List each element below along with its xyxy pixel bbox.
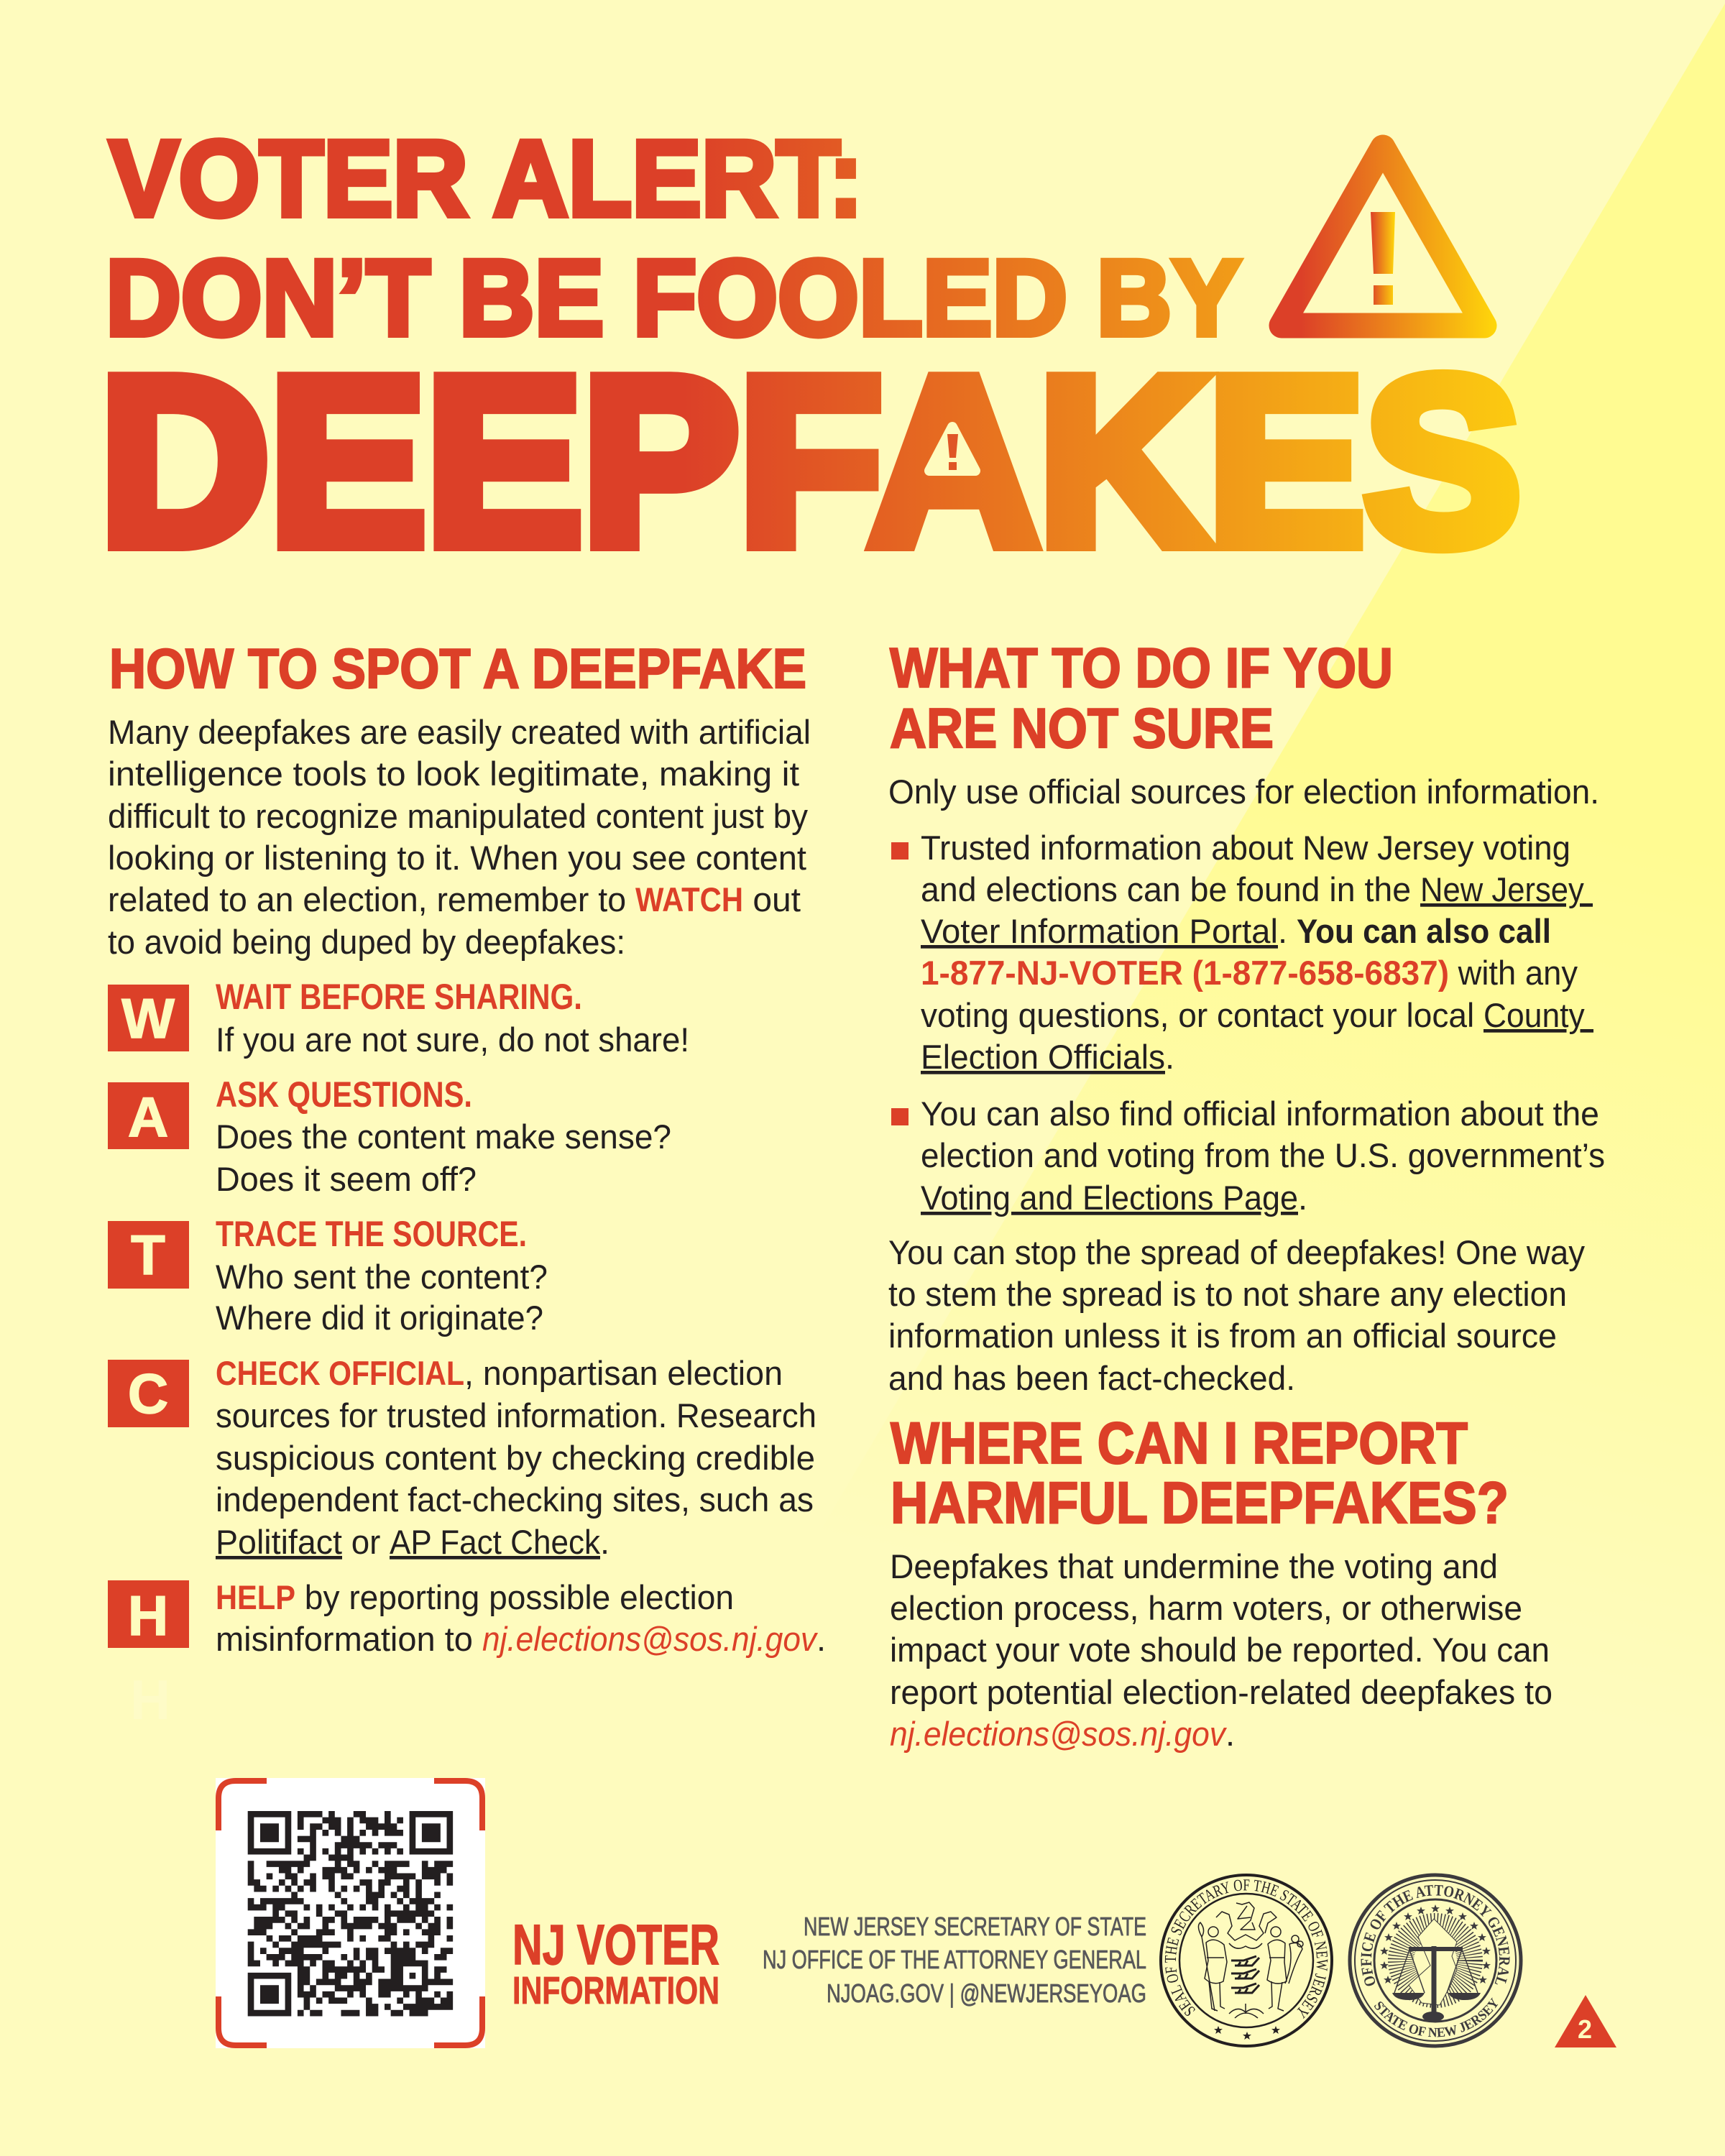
step H: help: nj.elections@sos.nj.gov [482,1620,818,1658]
bullet: U.S. government page: You can also find official information about the [921,1095,1599,1133]
heading: how to spot: HOW TO SPOT A DEEPFAKE [109,637,806,700]
page number badge [1555,1995,1616,2047]
QR code card [216,1778,485,2048]
text block: intro: Many deepfakes are easily created with artificial [108,713,811,751]
step W: wait before sharing: If you are not sure, do not share! [216,1021,689,1059]
text block: report details: Deepfakes that undermine the voting and [890,1547,1498,1585]
heading: where to report: WHERE CAN I REPORT [891,1411,1468,1476]
step C: check official: AP Fact Check [390,1523,600,1561]
bullet: U.S. government page: election and voting from the U.S. government’s [921,1136,1605,1174]
panel: what to do if you are not sure [888,636,1605,1397]
step A: ask questions: Does the content make sense? [216,1118,671,1156]
text block: report details: impact your vote should be reported. You can [890,1631,1550,1669]
step H: help: misinformation to [216,1620,482,1658]
text block: report details: nj.elections@sos.nj.gov [890,1715,1227,1753]
bullet: trusted information: . [1165,1038,1174,1076]
text block: intro [108,713,811,961]
step T: trace the source: TRACE THE SOURCE. [216,1214,527,1254]
bullet: trusted information: County [1484,996,1593,1034]
step C: check official: or [342,1523,390,1561]
text block: intro: to avoid being duped by deepfakes: [108,923,625,961]
step A: ask questions: A [128,1085,168,1148]
step H: help [108,1578,826,1658]
bullet: trusted information [891,829,1593,1076]
step C: check official: independent fact-checking sites, such as [216,1480,814,1519]
QR caption: NJ voter information: NJ VOTER [512,1912,719,1976]
step W: wait before sharing: W [121,987,175,1050]
bullet: U.S. government page [891,1095,1605,1217]
text block: intro: WATCH [635,880,743,918]
QR caption: NJ voter information: INFORMATION [512,1969,719,2012]
panel: how to spot a deepfake [108,637,826,1731]
text block: stop the spread: to stem the spread is to not share any election [888,1275,1567,1313]
heading: what to do: WHAT TO DO IF YOU [890,636,1393,699]
step W: wait before sharing [108,977,689,1059]
step T: trace the source [108,1214,548,1337]
step H: help: HELP [216,1578,295,1616]
seal: attorney general [1348,1873,1522,2048]
step H: help: by reporting possible election [295,1578,734,1616]
title: DON’T BE FOOLED BY [106,237,1241,358]
bullet: trusted information: Trusted information about New Jersey voting [921,829,1570,867]
step C: check official [108,1354,816,1561]
footer agency text: NJ OFFICE OF THE ATTORNEY GENERAL [763,1945,1146,1974]
text block: intro: out [743,880,801,918]
text block: report details [890,1547,1552,1753]
QR caption: NJ voter information [512,1912,719,2012]
text block: intro: difficult to recognize manipulated content just by [108,797,808,835]
text block: stop the spread: You can stop the spread of deepfakes! One way [888,1233,1585,1271]
step H: help: H [128,1584,168,1647]
text block: intro: looking or listening to it. When you see content [108,839,806,877]
step A: ask questions: ASK QUESTIONS. [216,1074,472,1115]
panel: where can I report [890,1411,1552,1753]
footer agency text [763,1912,1146,2008]
text block: official sources: Only use official sources for election information. [888,773,1599,811]
step C: check official: . [600,1523,610,1561]
icon: warning triangle [1282,147,1484,326]
text block: report details: election process, harm voters, or otherwise [890,1589,1522,1627]
step C: check official: C [128,1362,168,1425]
step A: ask questions: Does it seem off? [216,1160,477,1198]
bullet: trusted information: New Jersey [1420,870,1593,908]
text block: report details: report potential election-related deepfakes to [890,1673,1552,1711]
step T: trace the source: T [131,1223,165,1286]
step C: check official: CHECK OFFICIAL [216,1354,464,1392]
step C: check official: sources for trusted information. Research [216,1396,816,1434]
step T: trace the source: Who sent the content? [216,1258,548,1296]
icon: warning triangle inside letter A [929,427,975,471]
text block: report details: . [1225,1715,1235,1753]
step H: help: . [816,1620,826,1658]
step W: wait before sharing: WAIT BEFORE SHARING. [216,977,582,1017]
footer agency text: NJOAG.GOV | @NEWJERSEYOAG [827,1978,1146,2008]
bullet: U.S. government page: . [1298,1179,1307,1217]
bullet: trusted information: with any [1449,954,1578,992]
bullet: trusted information: voting questions, or contact your local [921,996,1484,1034]
heading: where to report [891,1411,1509,1536]
title: DEEPFAKES [100,328,1521,594]
text block: stop the spread: and has been fact-checked. [888,1359,1295,1397]
step C: check official: Politifact [216,1523,342,1561]
title: VOTER ALERT: [109,118,863,239]
page number badge: 2 [1578,2014,1592,2044]
bullet: trusted information: . [1278,912,1287,950]
bullet: trusted information: You can also call [1297,912,1551,950]
step T: trace the source: Where did it originate? [216,1299,543,1337]
heading: where to report: HARMFUL DEEPFAKES? [891,1470,1509,1536]
text block: stop the spread [888,1233,1585,1397]
step A: ask questions [108,1074,671,1198]
seal: secretary of state: SEAL OF THE SECRETARY OF THE STATE OF NEW JERSEY [1164,1879,1328,2019]
bullet: trusted information: and elections can be found in the [921,870,1420,908]
seal: attorney general: STATE OF NEW JERSEY [1374,1998,1498,2037]
step C: check official: suspicious content by checking credible [216,1439,815,1477]
ghost letter H: H [130,1668,170,1731]
seal: attorney general: OFFICE OF THE ATTORNEY GENERAL [1361,1884,1509,1986]
bullet: trusted information: 1-877-NJ-VOTER (1-877-658-6837) [921,954,1449,992]
heading: what to do [890,636,1393,760]
footer agency text: NEW JERSEY SECRETARY OF STATE [804,1912,1146,1941]
heading: what to do: ARE NOT SURE [890,696,1274,760]
bullet: U.S. government page: Voting and Elections Page [921,1179,1298,1217]
step C: check official: , nonpartisan election [464,1354,783,1392]
bullet: trusted information: Voter Information Portal [921,912,1278,950]
bullet: trusted information: Election Officials [921,1038,1165,1076]
text block: intro: intelligence tools to look legitimate, making it [108,755,799,793]
text block: intro: related to an election, remember to [108,880,635,918]
title [100,118,1521,594]
text block: stop the spread: information unless it is from an official source [888,1317,1557,1355]
